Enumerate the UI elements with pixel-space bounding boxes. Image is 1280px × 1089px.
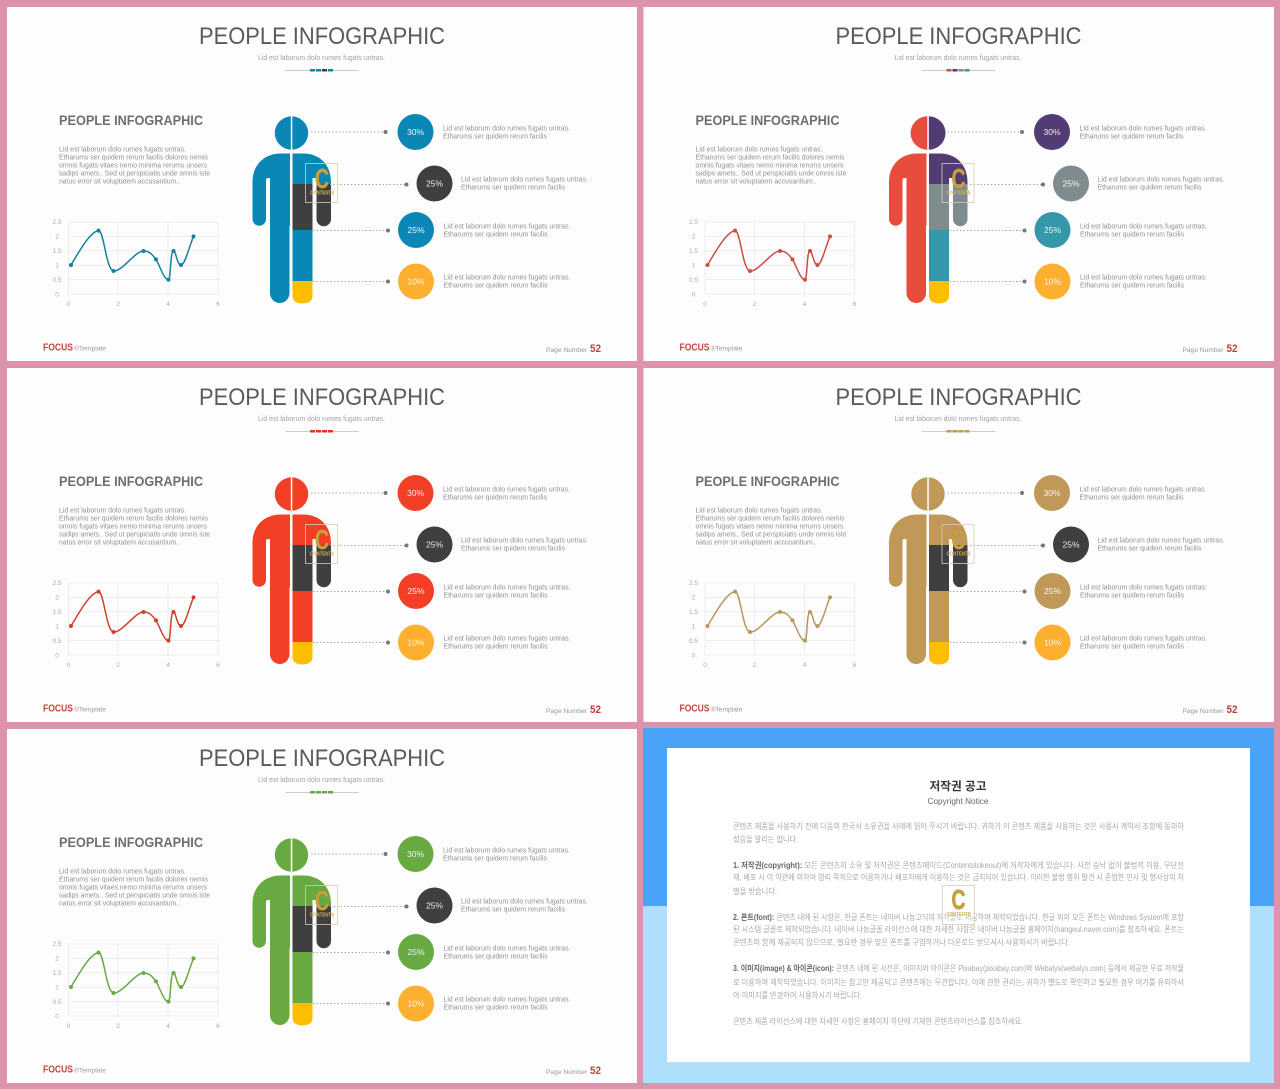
footer brand: ®Template — [710, 706, 743, 714]
callout 25%: Etharums ser quidem rerum facilis — [444, 592, 548, 600]
line chart: 1 — [55, 262, 59, 270]
human figure — [252, 838, 331, 1026]
callout 30%: Etharums ser quidem rerum facilis — [1080, 494, 1184, 502]
title: PEOPLE INFOGRAPHIC — [199, 23, 445, 50]
copyright paragraph: 1. 저작권(copyright): 모든 콘텐츠의 소유 및 저작권은 콘텐츠메이드(Contentstokeout)에 저작자에게 있습니다. 사전 승낙 없이 불법적 이용, 무단전 — [733, 860, 1184, 870]
callout 25%: 25% — [407, 225, 425, 235]
watermark: CONTENTS — [310, 190, 334, 196]
callout 10%: Etharums ser quidem rerum facilis — [444, 282, 548, 290]
watermark: CONTENTS — [946, 190, 971, 196]
subtitle: Lid est laborum dolo rumes fugats untras. — [894, 416, 1022, 423]
leader lines — [311, 491, 408, 644]
footer brand — [43, 1064, 106, 1075]
line chart: 0.5 — [52, 638, 62, 645]
panel: multicolour slide — [644, 7, 1274, 361]
copyright paragraph — [733, 860, 1184, 896]
page number: 52 — [1226, 343, 1238, 355]
line chart: 2 — [692, 234, 696, 240]
callout 10%: Etharums ser quidem rerum facilis — [444, 1004, 548, 1012]
page number: Page Number — [546, 347, 588, 354]
left body text — [59, 147, 210, 186]
font paragraph: 된 시스템 글꼴로 제작되었습니다. 네이버 나눔글꼴 라이선스에 대한 자세한 사항은 네이버 나눔글꼴 홈페이지(hangeul.naver.com)를 참조하세요. 폰트는 — [733, 924, 1184, 934]
callout 10%: Etharums ser quidem rerum facilis — [1080, 282, 1184, 290]
callout 30%: Lid est laborum dolo rumes fugats untras. — [1080, 126, 1207, 132]
panel: red slide — [7, 368, 637, 722]
line chart: 1.5 — [52, 609, 62, 616]
human figure — [252, 477, 331, 664]
left body text: Etharums ser quidem rerum facilis dolores nemis — [696, 155, 845, 162]
font paragraph — [733, 912, 1185, 947]
footer brand — [680, 703, 743, 714]
font paragraph: 2. 폰트(font): 콘텐츠 내에 된 사항은, 한글 폰트는 네이버 나눔고딕의 저작물로 제공하여 제작되었습니다. 한글 외의 모든 폰트는 Windows System에 포함 — [733, 912, 1185, 922]
page number — [546, 704, 601, 716]
callout 30%: 30% — [407, 127, 424, 137]
watermark: C — [952, 524, 966, 555]
watermark — [942, 884, 974, 924]
line chart: 1 — [692, 624, 696, 630]
panel: tan slide — [644, 368, 1274, 722]
subtitle: Lid est laborum dolo rumes fugats untras. — [258, 416, 385, 423]
title: PEOPLE INFOGRAPHIC — [199, 384, 445, 411]
callout 25% dark: Lid est laborum dolo rumes fugats untras. — [461, 898, 588, 906]
line chart: 2 — [116, 1023, 120, 1030]
left body text — [59, 508, 210, 547]
left body text: omnis fugats vitaes nemo minima rerums unsers — [59, 885, 207, 892]
callout 25%: Etharums ser quidem rerum facilis — [1080, 592, 1184, 600]
copyright paragraph: 재, 배포 시 이 약관에 의하여 영리 목적으로 이용하거나 배포자에게 이용하는 것은 금지되어 있습니다. 이러한 불법 행위 발견 시 준엄한 민사 및 형사상의 처 — [733, 872, 1184, 882]
title: PEOPLE INFOGRAPHIC — [199, 745, 445, 772]
line chart: 6 — [216, 662, 220, 669]
callout 30% — [398, 114, 570, 150]
callout 25% — [398, 934, 571, 970]
image paragraph: 로 이용하여 제작되었습니다. 이미지는 참고만 제공되고 콘텐츠에는 무관합니다. 이에 관한 권리는, 귀하가 별도로 확인하고 필요한 경우 여기를 유의하셔 — [733, 977, 1184, 987]
panel: green slide — [7, 729, 637, 1083]
page number — [546, 1065, 601, 1077]
callout 25% dark — [416, 166, 588, 202]
left heading: PEOPLE INFOGRAPHIC — [59, 835, 203, 850]
left heading: PEOPLE INFOGRAPHIC — [696, 113, 840, 128]
page number: 52 — [590, 343, 601, 355]
left body text: omnis fugats vitaes nemo minima rerums unsers — [59, 524, 207, 531]
line chart: 0 — [55, 1014, 59, 1020]
callout 25% grey: Lid est laborum dolo rumes fugats untras. — [1098, 176, 1225, 184]
intro paragraph: 콘텐츠 제품을 사용하기 전에 다음의 한국서 소유권을 사례에 읽어 주시기 바랍니다. 귀하가 이 콘텐츠 제품을 사용하는 것은 사용시 계약서 조항에 동의하 — [733, 821, 1185, 831]
left body text: Lid est laborum dolo rumes fugats untras. — [696, 147, 823, 154]
line chart: 0 — [703, 301, 707, 308]
leader lines — [948, 130, 1045, 284]
footer brand — [680, 342, 743, 353]
callout 25% grey: Etharums ser quidem rerum facilis — [1098, 184, 1202, 192]
footer brand — [43, 342, 106, 353]
callout 10% — [398, 986, 571, 1022]
left body text: omnis fugats vitaes nemo minima rerums unsers — [696, 524, 844, 531]
left heading: PEOPLE INFOGRAPHIC — [696, 474, 840, 489]
callout 25% — [398, 212, 571, 248]
left body text: natus error sit voluptatem accusantium.. — [59, 901, 180, 908]
page number: 52 — [1226, 704, 1238, 716]
line chart: 1.5 — [52, 248, 62, 255]
callout 10% — [1034, 624, 1207, 660]
human figure — [252, 116, 331, 304]
page number — [1182, 343, 1238, 355]
watermark — [306, 885, 338, 924]
intro paragraph — [733, 821, 1185, 844]
callout 30%: Lid est laborum dolo rumes fugats untras. — [443, 848, 570, 854]
line chart — [52, 580, 220, 669]
line chart: 0 — [55, 292, 59, 298]
callout 10%: 10% — [1044, 638, 1061, 648]
license note: 콘텐츠 제품 라이선스에 대한 자세한 사항은 홈페이지 하단에 기재한 콘텐츠라이선스를 참조하세요. — [733, 1016, 1023, 1026]
page number — [1182, 704, 1238, 716]
callout 25%: Lid est laborum dolo rumes fugats untras. — [444, 946, 571, 952]
line chart: 2 — [753, 662, 757, 669]
callout 25% dark — [1053, 526, 1225, 562]
callout 25% dark: Etharums ser quidem rerum facilis — [461, 906, 565, 914]
left body text: Etharums ser quidem rerum facilis dolores nemis — [696, 516, 845, 523]
line chart: 0 — [67, 1023, 71, 1030]
panel: copyright notice — [643, 728, 1274, 1083]
page number: Page Number — [546, 708, 588, 715]
subtitle: Lid est laborum dolo rumes fugats untras. — [258, 55, 385, 62]
watermark — [942, 163, 974, 202]
callout 10%: Lid est laborum dolo rumes fugats untras. — [444, 636, 571, 642]
left body text: Lid est laborum dolo rumes fugats untras. — [59, 869, 186, 876]
line chart: 0.5 — [689, 277, 698, 284]
line chart: 2.5 — [52, 941, 62, 948]
title divider — [285, 430, 359, 432]
title divider — [922, 69, 996, 72]
footer brand — [43, 703, 106, 714]
callout 25% dark: Lid est laborum dolo rumes fugats untras. — [1098, 538, 1225, 544]
line chart: 2 — [116, 662, 120, 669]
callout 25% teal: 25% — [1044, 225, 1061, 235]
line chart: 4 — [803, 301, 807, 308]
left body text: Lid est laborum dolo rumes fugats untras. — [59, 508, 186, 515]
callout 25%: Etharums ser quidem rerum facilis — [444, 232, 548, 238]
callout 25% dark: 25% — [426, 900, 443, 910]
callout 25% — [1034, 573, 1207, 609]
copyright subheading: Copyright Notice — [928, 796, 989, 806]
line chart: 2 — [55, 234, 59, 240]
left body text: omnis fugats vitaes nemo minima rerums unsers — [59, 163, 207, 170]
left body text: Etharums ser quidem rerum facilis dolores nemis — [59, 155, 208, 162]
callout 25%: 25% — [1044, 586, 1061, 596]
line chart: 2.5 — [689, 219, 698, 226]
line chart: 1.5 — [52, 970, 62, 977]
line chart: 4 — [166, 662, 170, 669]
callout 10%: Lid est laborum dolo rumes fugats untras. — [1080, 636, 1207, 642]
callout 10%: 10% — [1044, 276, 1061, 286]
watermark: CONTENTS — [946, 912, 971, 918]
line chart: 6 — [853, 662, 857, 669]
left body text: Lid est laborum dolo rumes fugats untras. — [696, 508, 823, 515]
watermark: CONTENTS — [946, 552, 971, 558]
line chart: 4 — [803, 662, 807, 669]
image paragraph: 야 이미지를 반경하여 사용하시기 바랍니다. — [733, 990, 862, 1000]
callout 10% — [398, 264, 571, 300]
line chart: 2 — [692, 594, 696, 602]
left body text: Etharums ser quidem rerum facilis dolores nemis — [59, 516, 208, 523]
left body text: natus error sit voluptatem accusantium.. — [59, 540, 180, 547]
intro paragraph: 셨음을 알리는 합니다. — [733, 834, 798, 844]
line chart — [52, 941, 220, 1030]
leader lines — [948, 491, 1045, 644]
callout 10% — [1034, 264, 1207, 300]
panel: blue slide — [7, 7, 637, 361]
title divider — [922, 430, 996, 432]
title divider — [285, 791, 359, 794]
callout 25%: Lid est laborum dolo rumes fugats untras. — [444, 584, 571, 592]
callout 10%: Lid est laborum dolo rumes fugats untras. — [1080, 274, 1207, 282]
callout 25%: Lid est laborum dolo rumes fugats untras. — [1080, 584, 1207, 592]
watermark — [306, 524, 338, 564]
callout 10%: Lid est laborum dolo rumes fugats untras. — [444, 274, 571, 282]
left body text: natus error sit voluptatem accusantium.. — [696, 540, 817, 547]
callout 25%: Etharums ser quidem rerum facilis — [444, 954, 548, 960]
line chart: 0.5 — [689, 638, 698, 645]
subtitle: Lid est laborum dolo rumes fugats untras. — [894, 55, 1022, 62]
callout 30% — [398, 836, 570, 872]
watermark: C — [315, 163, 329, 194]
footer brand: FOCUS — [43, 342, 73, 353]
callout 30%: Lid est laborum dolo rumes fugats untras. — [443, 126, 570, 132]
callout 25% dark: Etharums ser quidem rerum facilis — [461, 546, 565, 552]
line chart: 0 — [55, 652, 59, 660]
line chart: 2 — [753, 301, 757, 308]
left heading: PEOPLE INFOGRAPHIC — [59, 113, 203, 128]
callout 30% — [1034, 475, 1207, 511]
footer brand: FOCUS — [43, 703, 73, 714]
watermark — [306, 163, 338, 202]
callout 25% teal: Lid est laborum dolo rumes fugats untras. — [1080, 224, 1207, 230]
footer brand: ®Template — [74, 344, 106, 352]
left body text: natus error sit voluptatem accusantium.. — [696, 179, 817, 186]
footer brand: ®Template — [710, 344, 743, 352]
line chart: 2 — [55, 956, 59, 962]
human figure — [889, 116, 968, 304]
line chart: 2 — [55, 594, 59, 602]
callout 25% teal — [1034, 212, 1207, 248]
callout 30%: Lid est laborum dolo rumes fugats untras. — [443, 486, 570, 494]
title divider — [285, 69, 359, 72]
callout 30%: Lid est laborum dolo rumes fugats untras. — [1080, 486, 1207, 494]
line chart: 2 — [116, 301, 120, 308]
left body text: Lid est laborum dolo rumes fugats untras. — [59, 147, 186, 154]
line chart — [52, 219, 220, 308]
page number — [546, 343, 601, 355]
callout 25% dark: Etharums ser quidem rerum facilis — [461, 184, 565, 192]
line chart: 0 — [703, 662, 707, 669]
watermark: C — [952, 884, 966, 915]
left body text: omnis fugats vitaes nemo minima rerums unsers — [696, 163, 844, 170]
copyright heading: 저작권 공고 — [930, 779, 987, 793]
footer brand: FOCUS — [680, 342, 710, 353]
callout 30%: 30% — [407, 488, 424, 498]
font paragraph: 콘텐츠의 함께 제공되지 않으므로, 필요한 경우 맞은 폰트를 구입하거나 다운로드 받으셔서 사용하시기 바랍니다. — [733, 937, 1070, 947]
line chart: 6 — [216, 301, 220, 308]
title: PEOPLE INFOGRAPHIC — [836, 23, 1082, 50]
title: PEOPLE INFOGRAPHIC — [836, 384, 1082, 411]
line chart: 0.5 — [52, 277, 62, 284]
line chart: 1 — [55, 624, 59, 630]
callout 25% grey — [1053, 166, 1225, 202]
watermark: C — [952, 163, 966, 194]
line chart: 0 — [67, 662, 71, 669]
line chart: 2.5 — [52, 219, 62, 226]
watermark: CONTENTS — [310, 912, 334, 918]
left body text: Etharums ser quidem rerum facilis dolores nemis — [59, 877, 208, 884]
line chart: 2.5 — [689, 580, 698, 587]
watermark — [942, 524, 974, 564]
left body text: natus error sit voluptatem accusantium.. — [59, 179, 180, 186]
image paragraph: 3. 이미지(image) & 아이콘(icon): 콘텐츠 내에 된 사진은, 이미지와 아이콘은 Pixabay(pixabay.com)와 Webalys(webalys.com) 등에서 제공한 무료 저작물 — [733, 963, 1184, 973]
callout 25% dark: Lid est laborum dolo rumes fugats untras. — [461, 176, 588, 184]
left body text: sadips amets.. Sed ut perspiciatis unde omnis iste — [59, 893, 210, 900]
page number: 52 — [590, 1065, 601, 1077]
left body text — [59, 869, 210, 908]
callout 30%: Etharums ser quidem rerum facilis — [443, 494, 547, 502]
copyright paragraph: 벌을 받습니다. — [733, 886, 777, 896]
callout 25%: 25% — [407, 947, 425, 957]
subtitle: Lid est laborum dolo rumes fugats untras. — [258, 777, 385, 784]
callout 30%: 30% — [1043, 127, 1061, 137]
line chart: 0 — [692, 292, 696, 298]
footer brand: FOCUS — [43, 1064, 73, 1075]
callout 25% dark: Etharums ser quidem rerum facilis — [1098, 546, 1202, 552]
line chart — [689, 580, 857, 669]
watermark: CONTENTS — [310, 552, 334, 558]
callout 25% dark: 25% — [426, 178, 443, 188]
left body text: sadips amets.. Sed ut perspiciatis unde omnis iste — [59, 171, 210, 178]
line chart: 1 — [692, 262, 696, 270]
callout 10%: Etharums ser quidem rerum facilis — [444, 644, 548, 650]
callout 30%: 30% — [407, 849, 424, 859]
line chart — [689, 219, 857, 308]
callout 25%: 25% — [407, 586, 425, 596]
footer brand: FOCUS — [680, 703, 710, 714]
left body text — [696, 147, 847, 186]
callout 25% dark — [416, 888, 588, 924]
line chart: 1.5 — [689, 248, 698, 255]
page number: 52 — [590, 704, 601, 716]
callout 25%: Lid est laborum dolo rumes fugats untras. — [444, 224, 571, 230]
callout 10% — [398, 624, 571, 660]
callout 10%: Lid est laborum dolo rumes fugats untras. — [444, 996, 571, 1004]
callout 25% dark: 25% — [1062, 540, 1080, 550]
left body text: sadips amets.. Sed ut perspiciatis unde omnis iste — [696, 171, 847, 178]
left heading: PEOPLE INFOGRAPHIC — [59, 474, 203, 489]
line chart: 0.5 — [52, 999, 62, 1006]
left body text — [696, 508, 847, 547]
watermark: C — [315, 524, 329, 555]
callout 10%: 10% — [407, 998, 425, 1008]
line chart: 1.5 — [689, 609, 698, 616]
leader lines — [311, 130, 408, 284]
page number: Page Number — [1182, 347, 1224, 354]
callout 30% — [1034, 114, 1207, 150]
left body text: sadips amets.. Sed ut perspiciatis unde omnis iste — [59, 532, 210, 539]
callout 30%: Etharums ser quidem rerum facilis — [443, 856, 547, 862]
callout 25% dark — [416, 526, 588, 562]
callout 25% — [398, 573, 571, 609]
callout 10%: 10% — [407, 638, 425, 648]
callout 25% dark: 25% — [426, 540, 443, 550]
line chart: 2.5 — [52, 580, 62, 587]
callout 30% — [398, 475, 570, 511]
callout 30%: 30% — [1043, 488, 1061, 498]
left body text: sadips amets.. Sed ut perspiciatis unde omnis iste — [696, 532, 847, 539]
line chart: 4 — [166, 301, 170, 308]
callout 30%: Etharums ser quidem rerum facilis — [443, 134, 547, 140]
watermark: C — [315, 885, 329, 916]
callout 25% grey: 25% — [1062, 178, 1080, 188]
callout 10%: 10% — [407, 276, 425, 286]
page number: Page Number — [546, 1069, 588, 1076]
footer brand: ®Template — [74, 1066, 106, 1074]
callout 25% teal: Etharums ser quidem rerum facilis — [1080, 232, 1184, 238]
footer brand: ®Template — [74, 706, 106, 714]
callout 30%: Etharums ser quidem rerum facilis — [1080, 134, 1184, 140]
line chart: 0 — [67, 301, 71, 308]
line chart: 6 — [216, 1023, 220, 1030]
human figure — [889, 477, 968, 664]
page number: Page Number — [1182, 708, 1224, 715]
line chart: 1 — [55, 984, 59, 992]
callout 25% dark: Lid est laborum dolo rumes fugats untras. — [461, 538, 588, 544]
image paragraph — [733, 963, 1184, 1000]
callout 10%: Etharums ser quidem rerum facilis — [1080, 644, 1184, 650]
leader lines — [311, 852, 408, 1006]
line chart: 0 — [692, 652, 696, 660]
line chart: 4 — [166, 1023, 170, 1030]
line chart: 6 — [853, 301, 857, 308]
